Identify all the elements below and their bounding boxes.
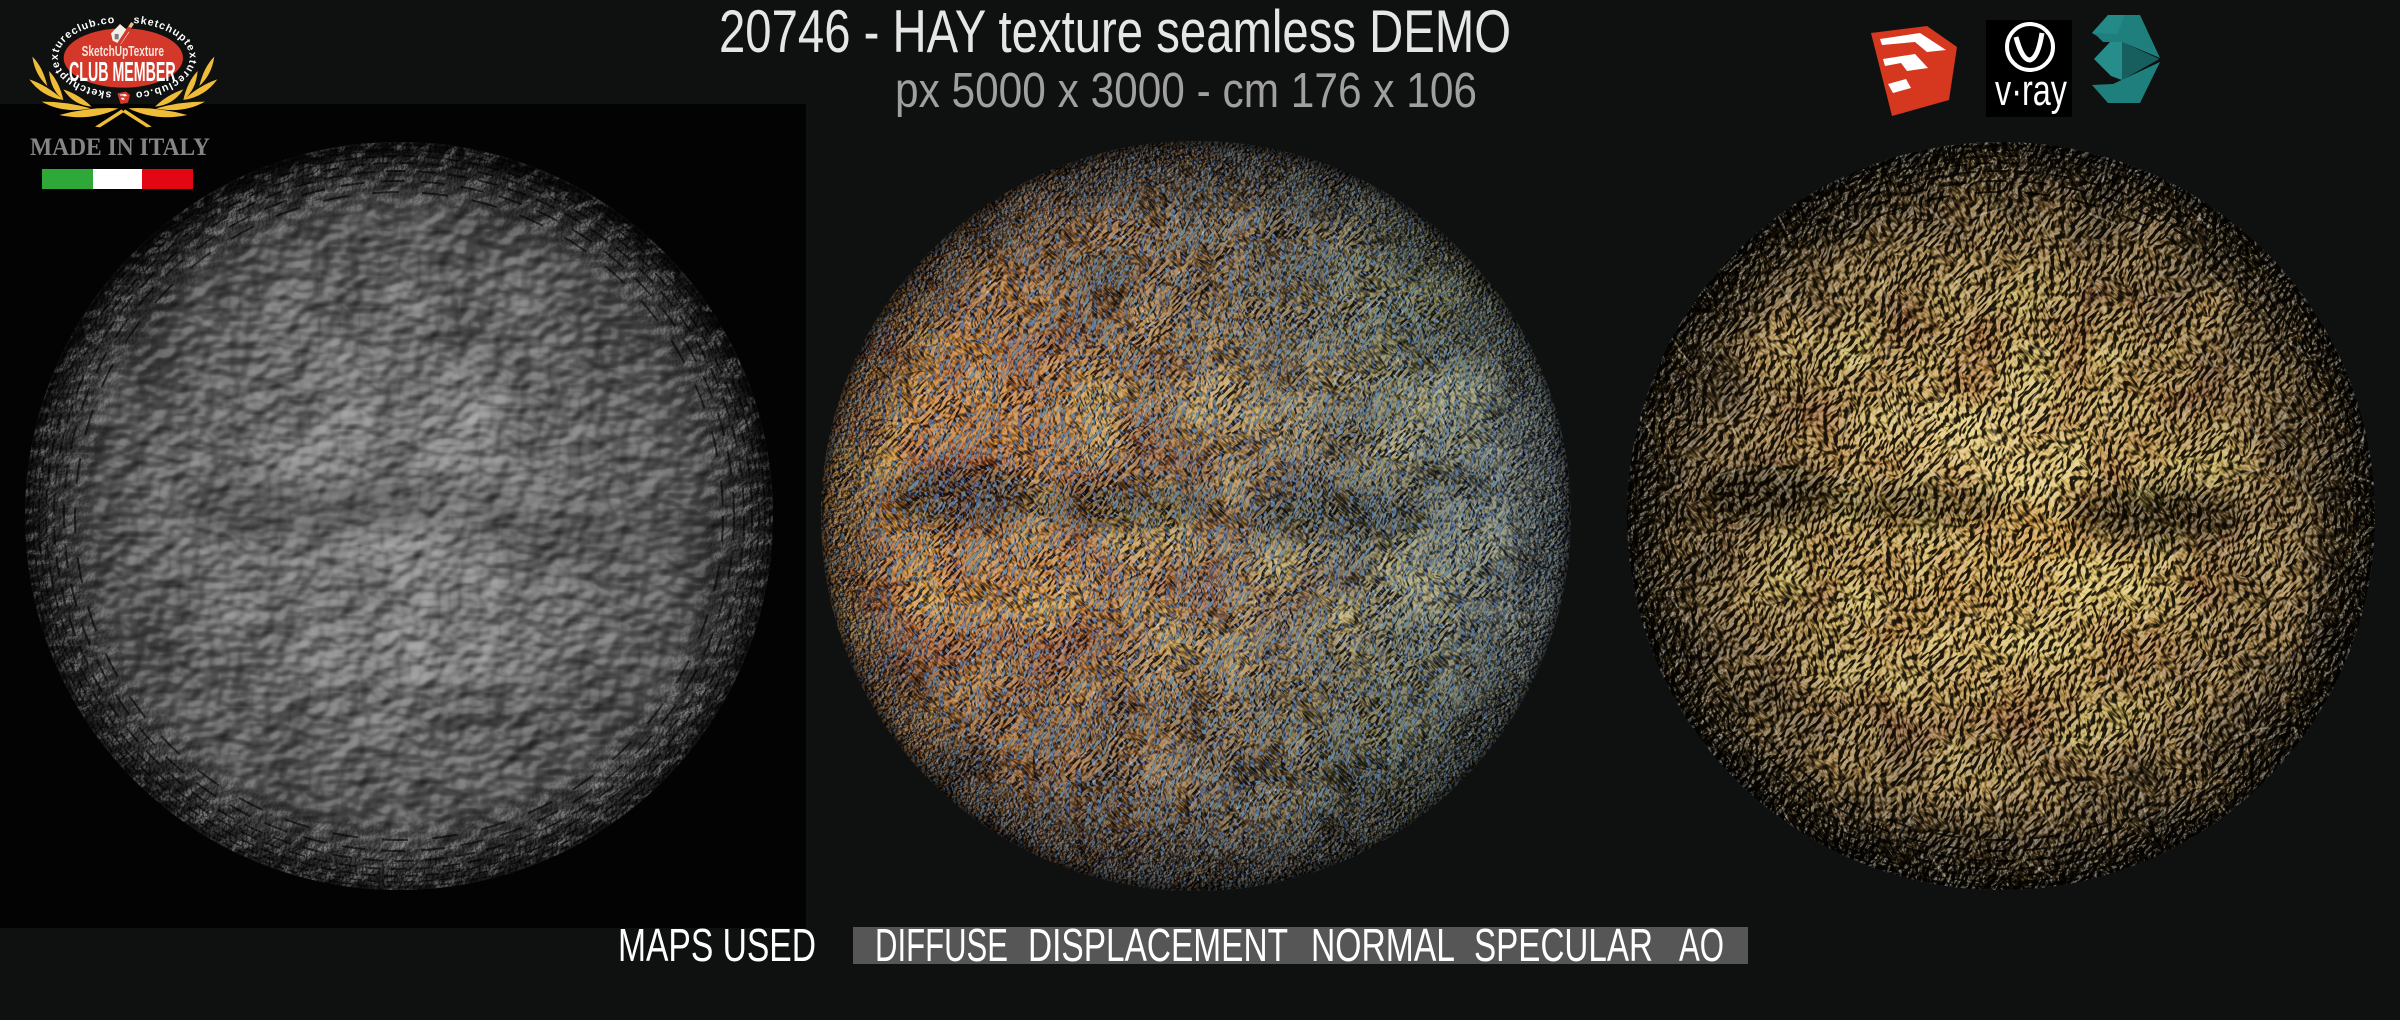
red oval xyxy=(64,28,183,88)
icon: v-ray logo xyxy=(1986,20,2072,117)
italian flag xyxy=(42,169,193,189)
maps list bar: NORMAL xyxy=(1311,919,1455,971)
sphere: displacement map (grey) xyxy=(25,142,773,890)
icon: sketchup logo xyxy=(1871,26,1957,116)
icon: small sketchup cube xyxy=(117,92,130,104)
maps list bar: DISPLACEMENT xyxy=(1028,919,1288,971)
icon: 3ds max logo xyxy=(2092,15,2160,103)
MADE IN ITALY label: MADE IN ITALY xyxy=(30,134,210,161)
icon: v-ray logo: v·ray xyxy=(1995,66,2067,115)
sphere: rendered hay, orange and blue lighting xyxy=(821,141,1580,891)
sphere: rendered hay, golden lighting xyxy=(1626,141,2377,892)
maps list bar: SPECULAR xyxy=(1474,919,1653,971)
subtitle dimensions: px 5000 x 3000 - cm 176 x 106 xyxy=(895,64,1477,118)
maps list bar: AO xyxy=(1679,919,1724,971)
maps list bar: DIFFUSE xyxy=(875,919,1008,971)
maps used label: MAPS USED xyxy=(618,919,816,971)
black panel behind displacement sphere xyxy=(0,104,806,928)
club member badge xyxy=(29,16,218,128)
icon: house and pencil xyxy=(111,22,134,46)
SketchUpTexture wordmark: SketchUpTexture xyxy=(82,44,164,60)
CLUB MEMBER wordmark: CLUB MEMBER xyxy=(69,56,176,87)
title: 20746 - HAY texture seamless DEMO xyxy=(719,0,1511,65)
laurel wreath xyxy=(29,57,217,127)
maps list bar xyxy=(853,919,1748,971)
